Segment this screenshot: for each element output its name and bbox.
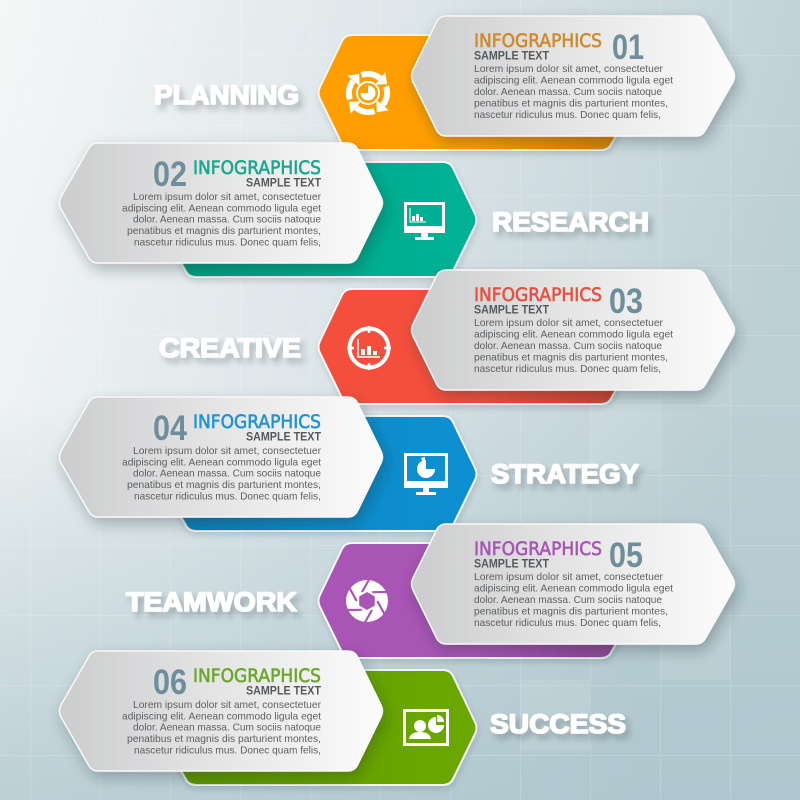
body text 03: adipiscing elit. Aenean commodo ligula eget	[474, 328, 673, 340]
body text 03: nascetur ridiculus mus. Donec quam felis,	[474, 363, 661, 375]
body text 02: penatibus et magnis dis parturient montes,	[127, 225, 321, 237]
arrow shape: red	[318, 289, 625, 404]
body text 05: nascetur ridiculus mus. Donec quam felis,	[474, 617, 661, 629]
heading 05: INFOGRAPHICS	[474, 538, 602, 560]
body text 01: Lorem ipsum dolor sit amet, consectetuer	[474, 63, 663, 75]
body text 05: penatibus et magnis dis parturient montes,	[474, 606, 668, 618]
panel: step 06 success	[60, 651, 626, 785]
body text 04	[122, 445, 321, 502]
icon: target with bars	[347, 326, 391, 370]
panel: step 01 planning	[154, 16, 734, 150]
body text 06: penatibus et magnis dis parturient montes,	[127, 733, 321, 745]
body text 04: nascetur ridiculus mus. Donec quam felis,	[134, 490, 321, 502]
body text 01: dolor. Aenean massa. Cum sociis natoque	[474, 86, 662, 98]
body text 06	[122, 699, 321, 756]
body text 04: penatibus et magnis dis parturient montes,	[127, 479, 321, 491]
card 01	[412, 16, 734, 136]
body text 04: dolor. Aenean massa. Cum sociis natoque	[133, 468, 321, 480]
body text 01: nascetur ridiculus mus. Donec quam felis,	[474, 109, 661, 121]
label: teamwork: TEAMWORK	[126, 587, 298, 617]
subheading 05: SAMPLE TEXT	[474, 556, 550, 570]
icon: rotating arrows around pie	[347, 72, 389, 114]
body text 05: dolor. Aenean massa. Cum sociis natoque	[474, 594, 662, 606]
card 03	[412, 270, 734, 390]
body text 02	[122, 191, 321, 248]
panel: step 02 research	[60, 143, 649, 277]
panel: step 05 teamwork	[126, 524, 734, 658]
heading 03: INFOGRAPHICS	[474, 284, 602, 306]
panel: step 03 creative	[159, 270, 734, 404]
heading 02: INFOGRAPHICS	[193, 157, 321, 179]
subheading 04: SAMPLE TEXT	[246, 430, 322, 444]
body text 03: Lorem ipsum dolor sit amet, consectetuer	[474, 317, 663, 329]
subheading 06: SAMPLE TEXT	[246, 684, 322, 698]
panel: step 04 strategy	[60, 397, 639, 531]
body text 06: dolor. Aenean massa. Cum sociis natoque	[133, 722, 321, 734]
icon: monitor with pie	[404, 453, 448, 495]
number 03: 03	[609, 282, 643, 321]
body text 02: nascetur ridiculus mus. Donec quam felis,	[134, 236, 321, 248]
heading 06: INFOGRAPHICS	[193, 665, 321, 687]
label: research: RESEARCH	[492, 207, 649, 237]
body text 01: adipiscing elit. Aenean commodo ligula eget	[474, 74, 673, 86]
number 02: 02	[153, 155, 187, 194]
body text 03: penatibus et magnis dis parturient montes,	[474, 352, 668, 364]
label: success: SUCCESS	[490, 709, 626, 739]
body text 02: dolor. Aenean massa. Cum sociis natoque	[133, 214, 321, 226]
body text 06: nascetur ridiculus mus. Donec quam felis,	[134, 744, 321, 756]
body text 05: Lorem ipsum dolor sit amet, consectetuer	[474, 571, 663, 583]
body text 02: adipiscing elit. Aenean commodo ligula eget	[122, 202, 321, 214]
number 04: 04	[153, 409, 187, 448]
card 02	[60, 143, 382, 263]
icon: monitor with bars	[404, 202, 445, 240]
label: planning: PLANNING	[154, 80, 299, 110]
body text 06: adipiscing elit. Aenean commodo ligula eget	[122, 710, 321, 722]
number 01: 01	[612, 28, 644, 67]
card 04	[60, 397, 382, 517]
number 06: 06	[153, 663, 187, 702]
heading 04: INFOGRAPHICS	[193, 411, 321, 433]
body text 02: Lorem ipsum dolor sit amet, consectetuer	[133, 191, 321, 203]
body text 06: Lorem ipsum dolor sit amet, consectetuer	[133, 699, 321, 711]
body text 01	[474, 63, 673, 121]
card 05	[412, 524, 734, 644]
arrow shape: blue	[172, 416, 476, 531]
body text 05: adipiscing elit. Aenean commodo ligula eget	[474, 582, 673, 594]
body text 03	[474, 317, 673, 375]
body text 05	[474, 571, 673, 629]
subheading 02: SAMPLE TEXT	[246, 176, 322, 190]
label: creative: CREATIVE	[159, 333, 301, 363]
label: strategy: STRATEGY	[491, 459, 639, 489]
icon: presentation frame with person and pie	[404, 710, 448, 744]
body text 03: dolor. Aenean massa. Cum sociis natoque	[474, 340, 662, 352]
body text 04: Lorem ipsum dolor sit amet, consectetuer	[133, 445, 321, 457]
icon: camera aperture	[346, 578, 388, 624]
subheading 03: SAMPLE TEXT	[474, 302, 550, 316]
arrow shape: orange	[318, 35, 625, 150]
body text 04: adipiscing elit. Aenean commodo ligula eget	[122, 456, 321, 468]
arrow shape: green	[172, 670, 476, 785]
subheading 01: SAMPLE TEXT	[474, 48, 550, 62]
arrow shape: purple	[318, 543, 625, 658]
heading 01: INFOGRAPHICS	[474, 30, 602, 52]
number 05: 05	[609, 536, 643, 575]
arrow shape: teal	[172, 162, 476, 277]
body text 01: penatibus et magnis dis parturient montes,	[474, 98, 668, 110]
card 06	[60, 651, 382, 771]
